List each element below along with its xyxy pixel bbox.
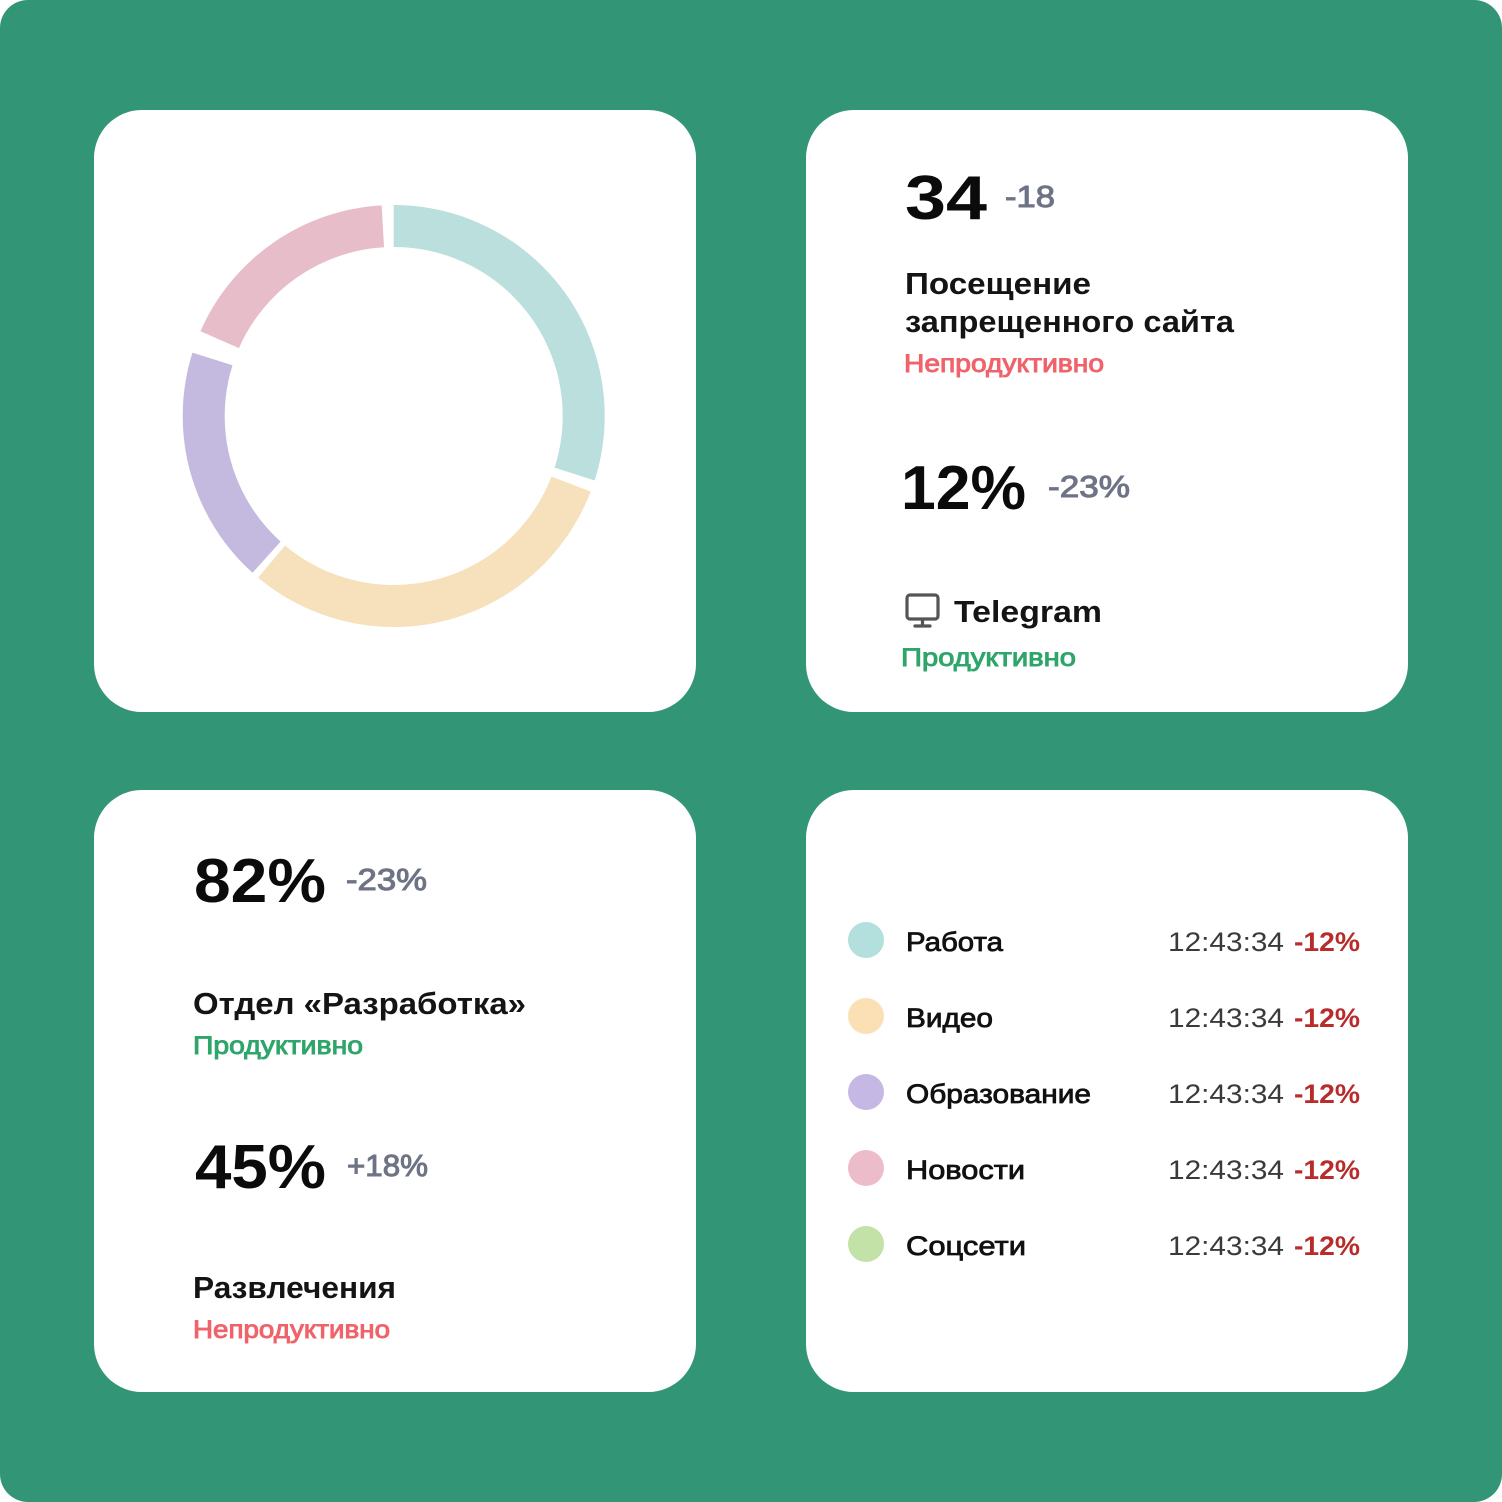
legend row: education: Образование (906, 1079, 1091, 1109)
legend row: video (848, 998, 1360, 1034)
heading: development department: Отдел «Разработка» (193, 986, 526, 1021)
panel: donut chart (94, 110, 696, 712)
legend row: education: -12% (1294, 1079, 1360, 1109)
status: unproductive: Непродуктивно (904, 350, 1104, 378)
panel: legend (806, 790, 1408, 1392)
status: productive: Продуктивно (193, 1032, 363, 1060)
donut ring chart (204, 226, 584, 606)
metric: 45%: 45% (195, 1133, 326, 1202)
delta: -23%: -23% (346, 862, 427, 897)
legend row: work: Работа (906, 927, 1004, 957)
delta: -18: -18 (1005, 179, 1055, 214)
status: unproductive: Непродуктивно (193, 1316, 390, 1344)
delta: -23%: -23% (1048, 469, 1130, 504)
legend row: news: Новости (906, 1155, 1025, 1185)
legend row: video: -12% (1294, 1003, 1360, 1033)
legend row: video: 12:43:34 (1168, 1003, 1284, 1033)
legend row: news: -12% (1294, 1155, 1360, 1185)
label: Telegram: Telegram (954, 594, 1102, 629)
heading: entertainment: Развлечения (193, 1270, 396, 1305)
panel: metrics bottom left (94, 790, 696, 1392)
legend row: work: -12% (1294, 927, 1360, 957)
legend row: news: 12:43:34 (1168, 1155, 1284, 1185)
legend row: news (848, 1150, 1360, 1186)
legend row: social: -12% (1294, 1231, 1360, 1261)
legend row: work (848, 922, 1360, 958)
status: productive: Продуктивно (901, 644, 1076, 672)
legend row: education (848, 1074, 1360, 1110)
legend row: social (848, 1226, 1360, 1262)
heading: forbidden site: Посещение (905, 266, 1091, 301)
metric: 82%: 82% (194, 847, 326, 916)
metric: 34: 34 (905, 164, 988, 233)
metric: 12%: 12% (901, 454, 1026, 523)
legend row: social: 12:43:34 (1168, 1231, 1284, 1261)
icon: monitor (907, 595, 938, 626)
legend row: work: 12:43:34 (1168, 927, 1284, 957)
legend row: video: Видео (906, 1003, 993, 1033)
delta: +18%: +18% (347, 1148, 428, 1183)
legend row: social: Соцсети (906, 1231, 1026, 1261)
legend row: education: 12:43:34 (1168, 1079, 1284, 1109)
panel: metrics top right (806, 110, 1408, 712)
heading line two: запрещенного сайта (905, 304, 1235, 339)
